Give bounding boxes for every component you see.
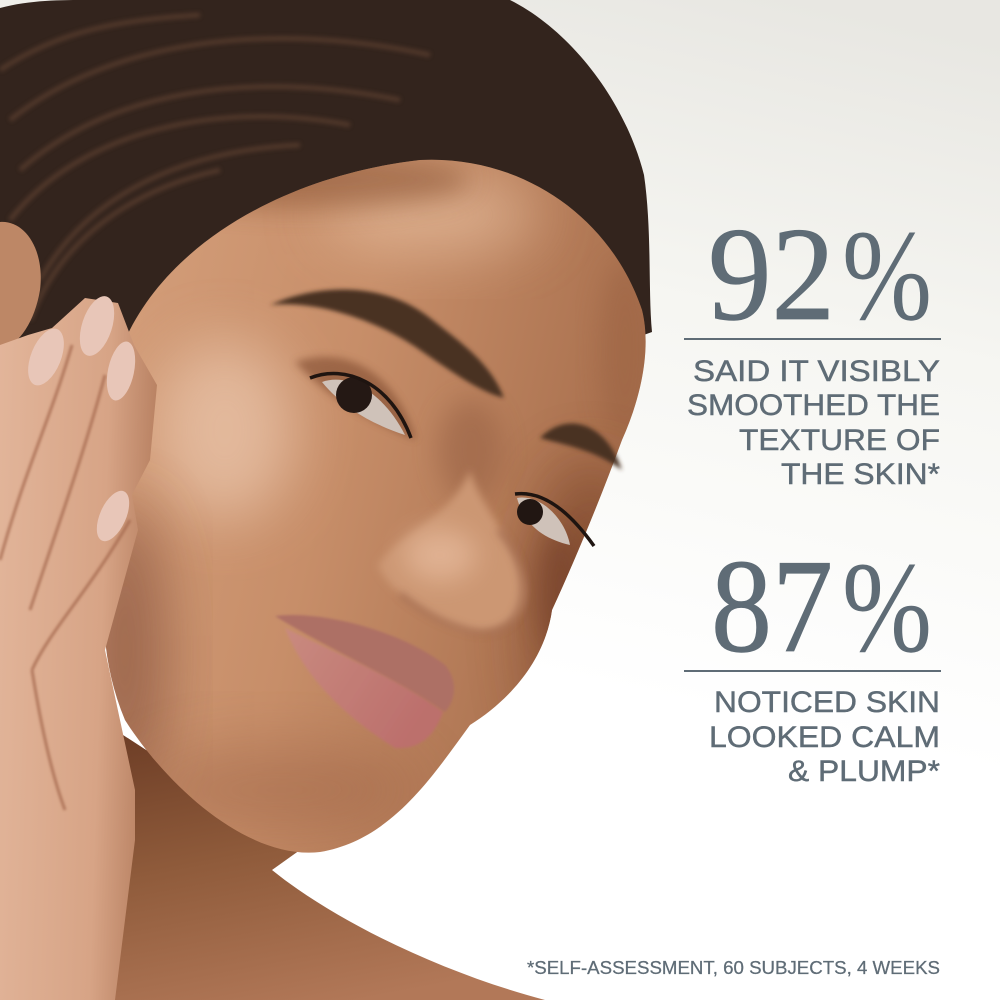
- divider: [684, 670, 941, 672]
- percent sign: %: [842, 204, 932, 348]
- eyebrow right: [540, 424, 622, 470]
- number: 87: [711, 532, 833, 680]
- caption: TEXTURE OF: [739, 424, 940, 457]
- caption: NOTICED SKIN: [714, 686, 940, 719]
- photo: woman touching her face: [0, 0, 652, 1000]
- neck and shoulder: [100, 720, 545, 1000]
- caption: LOOKED CALM: [709, 721, 940, 754]
- hand: [0, 292, 157, 1000]
- footnote: *SELF-ASSESSMENT, 60 SUBJECTS, 4 WEEKS: [527, 958, 940, 978]
- caption: SMOOTHED THE: [687, 389, 940, 422]
- nose: [378, 470, 525, 632]
- hair highlights: [0, 15, 430, 320]
- caption: [687, 355, 940, 491]
- fingernails: [21, 292, 140, 546]
- stat: 92 percent: [684, 200, 941, 491]
- percent sign: %: [842, 536, 932, 680]
- hair: [0, 0, 652, 420]
- face: [104, 160, 646, 853]
- lips: [275, 615, 454, 748]
- finger gaps: [0, 345, 130, 810]
- eye right: [515, 494, 594, 546]
- stat: 87 percent: [684, 532, 941, 788]
- caption: [709, 686, 940, 788]
- ear: [0, 222, 41, 350]
- divider: [684, 338, 941, 340]
- eye left: [295, 357, 416, 440]
- eyebrow left: [270, 290, 504, 398]
- caption: THE SKIN*: [781, 458, 940, 491]
- caption: & PLUMP*: [788, 755, 940, 788]
- number: 92: [708, 200, 835, 348]
- caption: SAID IT VISIBLY: [693, 355, 940, 388]
- face shading: [85, 152, 650, 835]
